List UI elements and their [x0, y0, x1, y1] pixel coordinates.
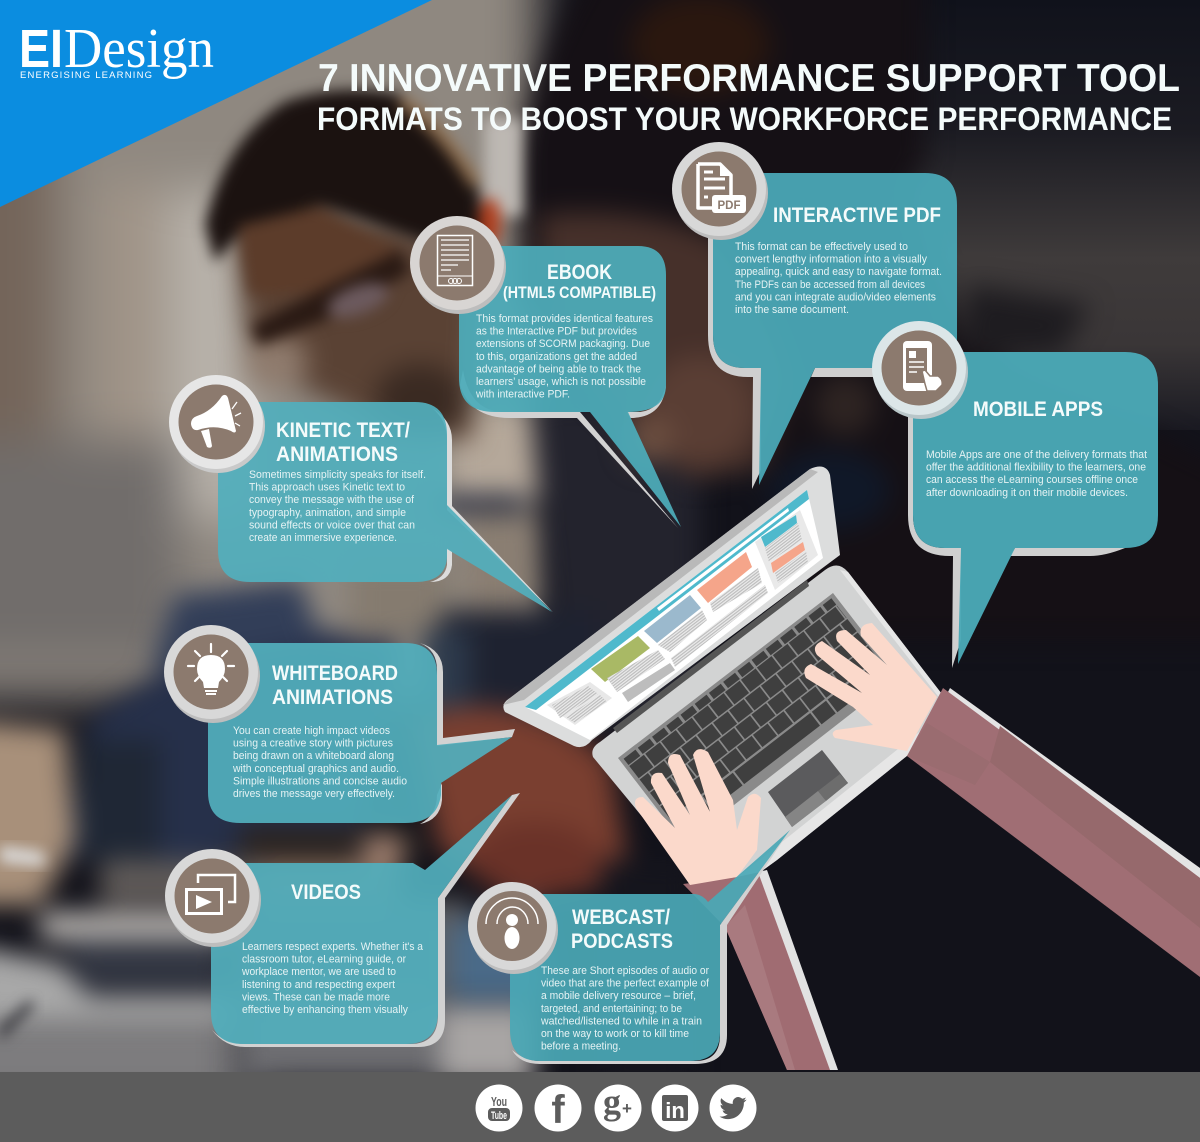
- whiteboard text: Simple illustrations and concise audio: [233, 775, 407, 787]
- pdf text: appealing, quick and easy to navigate format.: [735, 266, 942, 278]
- footer bar: [0, 1072, 1200, 1142]
- webcast text: These are Short episodes of audio or: [541, 965, 709, 977]
- whiteboard text: being drawn on a whiteboard along: [233, 750, 394, 762]
- webcast text: targeted, and entertaining; to be: [541, 1003, 682, 1015]
- kinetic text: create an immersive experience.: [249, 532, 397, 544]
- icon: pdf document: PDF: [718, 200, 740, 212]
- ebook text: with interactive PDF.: [475, 389, 570, 401]
- icon: pdf document: [672, 142, 768, 240]
- ebook text: as the Interactive PDF but provides: [476, 326, 637, 338]
- panel: kinetic text animations: [169, 375, 553, 612]
- ebook text: learners’ usage, which is not possible: [476, 376, 646, 388]
- panel: interactive pdf: [672, 142, 957, 489]
- webcast text: [540, 965, 710, 1053]
- pdf text: The PDFs can be accessed from all devices: [735, 279, 925, 291]
- pdf heading: INTERACTIVE PDF: [773, 204, 941, 227]
- whiteboard heading: ANIMATIONS: [272, 686, 393, 709]
- panel: mobile apps: [872, 321, 1158, 668]
- title: 7 INNOVATIVE PERFORMANCE SUPPORT TOOL: [318, 57, 1180, 100]
- pdf text: [735, 241, 942, 316]
- icon: youtube: Tube: [491, 1110, 507, 1122]
- ebook heading: (HTML5 COMPATIBLE): [503, 283, 656, 302]
- mobile text: offer the additional flexibility to the learners, one: [926, 462, 1146, 474]
- brand corner banner: [0, 0, 432, 207]
- whiteboard heading: WHITEBOARD: [272, 662, 398, 685]
- mobile text: after downloading it on their mobile devices.: [926, 487, 1128, 499]
- videos text: Learners respect experts. Whether it's a: [242, 941, 424, 953]
- whiteboard text: You can create high impact videos: [233, 725, 390, 737]
- kinetic text: Sometimes simplicity speaks for itself.: [249, 469, 426, 481]
- mobile text: can access the eLearning courses offline once: [926, 474, 1138, 486]
- icon: facebook: [534, 1084, 582, 1132]
- logo: EI: [19, 19, 63, 79]
- panel: webcast podcasts: [468, 830, 790, 1064]
- icon: linkedin: in: [665, 1098, 685, 1123]
- videos text: [241, 941, 424, 1016]
- ebook text: to this, organizations get the added: [476, 351, 637, 363]
- icon: facebook: f: [551, 1088, 565, 1132]
- ebook heading: EBOOK: [547, 261, 612, 284]
- icon: lightbulb: [164, 625, 260, 723]
- ebook text: This format provides identical features: [476, 313, 653, 325]
- icon: youtube: [476, 1084, 522, 1132]
- whiteboard heading: [272, 662, 398, 709]
- pdf text: This format can be effectively used to: [735, 241, 908, 253]
- title: [317, 57, 1180, 137]
- panel: ebook: [410, 216, 681, 528]
- right hand: [804, 623, 937, 751]
- webcast heading: PODCASTS: [571, 930, 673, 953]
- videos text: workplace mentor, we are used to: [241, 966, 396, 978]
- kinetic heading: KINETIC TEXT/: [276, 419, 410, 442]
- pdf text: convert lengthy information into a visually: [735, 254, 927, 266]
- kinetic text: sound effects or voice over that can: [249, 519, 415, 531]
- mobile heading: MOBILE APPS: [973, 398, 1103, 421]
- icon: youtube: You: [491, 1094, 507, 1109]
- mobile text: [926, 449, 1147, 499]
- whiteboard text: using a creative story with pictures: [233, 738, 393, 750]
- ebook text: extensions of SCORM packaging. Due: [476, 338, 650, 350]
- pdf text: and you can integrate audio/video elements: [735, 291, 936, 303]
- webcast text: a mobile delivery resource – brief,: [541, 990, 696, 1002]
- icon: linkedin: [652, 1084, 698, 1132]
- mobile text: Mobile Apps are one of the delivery formats that: [926, 449, 1147, 461]
- webcast text: watched/listened to while in a train: [540, 1015, 702, 1027]
- webcast text: before a meeting.: [541, 1041, 621, 1053]
- kinetic text: This approach uses Kinetic text to: [249, 482, 405, 494]
- webcast heading: [571, 906, 673, 953]
- ebook heading: [503, 261, 656, 302]
- panel: videos: [165, 793, 520, 1047]
- kinetic text: typography, animation, and simple: [249, 507, 406, 519]
- videos text: listening to and respecting expert: [242, 979, 395, 991]
- webcast text: video that are the perfect example of: [541, 978, 710, 990]
- whiteboard text: drives the message very effectively.: [233, 788, 395, 800]
- icon: twitter: [710, 1084, 756, 1132]
- kinetic text: [249, 469, 426, 544]
- panel: whiteboard animations: [164, 625, 515, 824]
- whiteboard text: [232, 725, 407, 800]
- keyboard keys: [626, 601, 884, 827]
- icon: megaphone: [169, 375, 265, 473]
- videos text: views. These can be made more: [242, 991, 390, 1003]
- logo: ENERGISING LEARNING: [20, 70, 152, 81]
- laptop screen: [503, 467, 840, 747]
- icon: ebook reader: [410, 216, 506, 314]
- sleeves: [683, 688, 1200, 1070]
- laptop illustration: [503, 467, 1200, 1070]
- whiteboard text: with conceptual graphics and audio.: [232, 763, 399, 775]
- icon: video frames: [165, 849, 261, 947]
- videos heading: VIDEOS: [291, 881, 361, 904]
- logo: Design: [64, 18, 214, 80]
- videos text: classroom tutor, eLearning guide, or: [242, 954, 406, 966]
- laptop base: [592, 565, 958, 905]
- icon: google plus: +: [622, 1099, 632, 1118]
- icon: google plus: g: [603, 1082, 621, 1122]
- webcast text: on the way to work or to kill time: [541, 1028, 689, 1040]
- trackpad: [768, 750, 848, 827]
- pdf text: into the same document.: [735, 304, 849, 316]
- kinetic heading: ANIMATIONS: [276, 443, 398, 466]
- kinetic text: convey the message with the use of: [249, 494, 415, 506]
- webcast heading: WEBCAST/: [572, 906, 670, 929]
- icon: broadcaster: [468, 882, 558, 974]
- kinetic heading: [276, 419, 410, 466]
- icon: mobile phone: [872, 321, 968, 419]
- left hand: [635, 749, 761, 885]
- ebook text: [475, 313, 653, 401]
- icon: google plus: [594, 1082, 642, 1132]
- ebook text: advantage of being able to track the: [476, 363, 641, 375]
- videos text: effective by enhancing them visually: [242, 1004, 408, 1016]
